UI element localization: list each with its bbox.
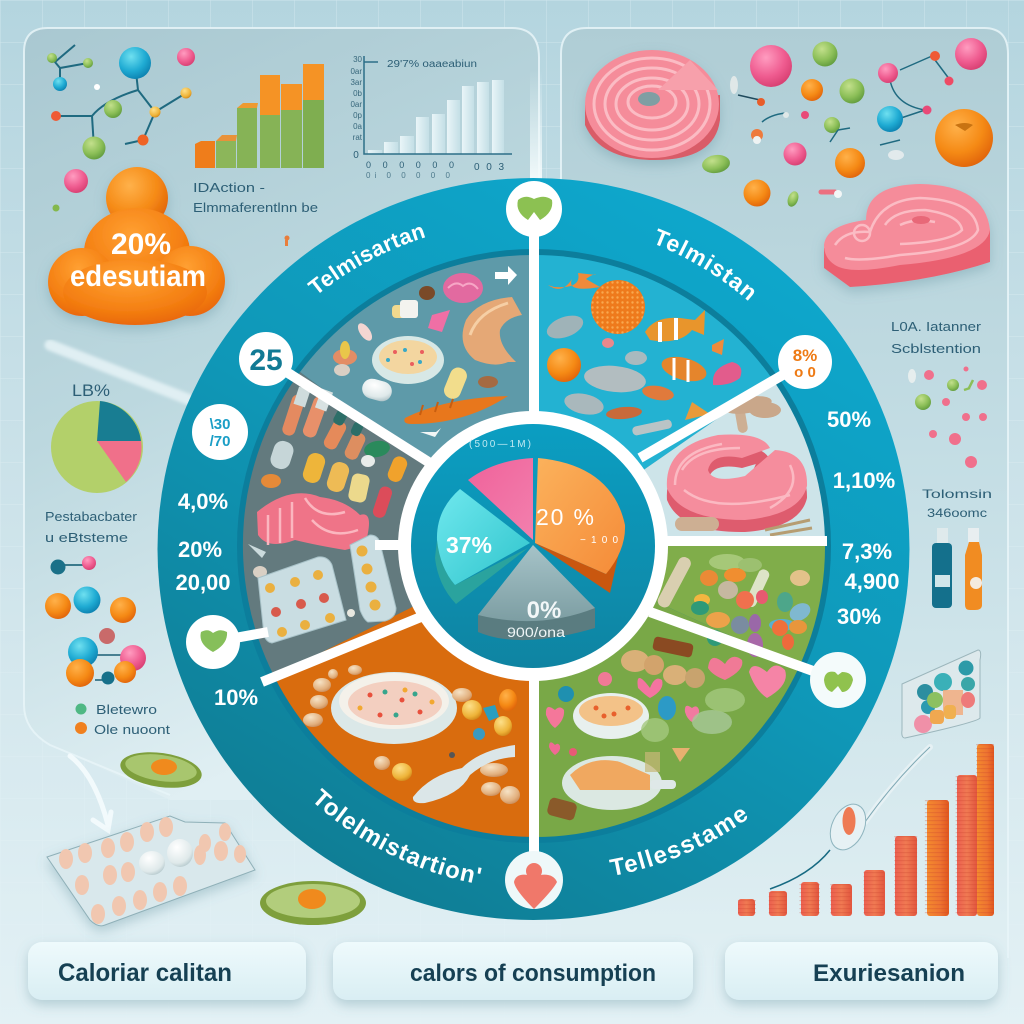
meat: right pale segment [667, 393, 812, 535]
bar chart: pale bars with axis: 0i 0 0 0 0 0 [366, 171, 451, 180]
center hub with pie chart [398, 411, 668, 681]
panel: top left [24, 28, 539, 800]
ring label: bottom right: Tellesstame [609, 810, 748, 875]
text: bottle note [922, 487, 992, 520]
chart caption: IDAction - [193, 180, 265, 195]
button: Caloriar calitan [28, 942, 306, 1000]
bar chart: pale bars with axis: 0 [353, 150, 359, 161]
pie slice: cyan: 37% [446, 532, 492, 558]
ring label: top right: Telmistan [657, 228, 754, 301]
pie caption: Pestabacbater [45, 509, 138, 524]
bar chart: pale bars with axis: 0ar [350, 100, 362, 109]
badge: green leaf right [810, 652, 866, 708]
bar chart: pale bars with axis: 0 0 0 0 0 0 [366, 160, 454, 170]
pie slice: orange: 20 % [536, 504, 594, 530]
pie caption: u eBtsteme [45, 530, 128, 545]
food items: top right fish segment [544, 273, 741, 436]
button: calors of consumption: calors of consumption [410, 960, 656, 987]
pills: left gray segment [248, 387, 409, 643]
segment: lower left orange [274, 546, 534, 837]
food items: lower left orange segment [303, 665, 520, 804]
chart caption [193, 180, 318, 215]
segment: lower right green [534, 546, 799, 837]
segment: left gray [243, 372, 534, 676]
ring label: bottom left: Tolelmistartion' [315, 788, 482, 883]
pie chart: left: LB% [72, 381, 110, 400]
small hearts [908, 366, 987, 468]
center hub with pie chart: (500—1M) [469, 439, 531, 450]
pills: right green segment [656, 554, 814, 657]
bar chart: pale bars with axis [350, 55, 512, 180]
ring percentages: 10% [214, 685, 258, 710]
button: calors of consumption [333, 942, 693, 1000]
legend [75, 702, 170, 737]
text: bottle note: Tolomsin [922, 487, 992, 501]
badge: 30/70: /70 [210, 433, 230, 450]
callout: orange blob 20%: edesutiam [70, 260, 206, 293]
molecule: left spheres [45, 556, 146, 687]
food items: lower right green segment [546, 636, 786, 821]
ring percentages: 4,0% [178, 489, 228, 514]
badge: 8% orange: o 0 [794, 364, 816, 381]
chart caption: Elmmaferentlnn be [193, 200, 318, 215]
ring percentages: 1,10% [833, 468, 895, 493]
bar chart: pale bars with axis: 0b [353, 89, 363, 98]
panel: top right [561, 28, 1008, 958]
segment: top right cyan [534, 255, 773, 546]
button: Caloriar calitan: Caloriar calitan [58, 959, 232, 987]
text: right upper note: L0A. Iatanner [891, 319, 982, 334]
spoon [770, 747, 930, 889]
bottles [932, 528, 982, 610]
ring percentages: 7,3% [842, 539, 892, 564]
badge: 30/70 [192, 404, 248, 460]
pie slice: gray: 900/ona [507, 624, 565, 640]
molecule: top left [47, 45, 195, 160]
legend: Ole nuoont [94, 722, 170, 737]
pie chart: left [51, 381, 143, 493]
text: right upper note [891, 319, 982, 356]
callout: orange blob 20%: 20% [111, 228, 171, 261]
pie caption [45, 509, 138, 545]
white spokes [213, 200, 838, 880]
pie slice: orange [535, 458, 625, 593]
meat: top right ring [585, 50, 720, 160]
bar chart: pale bars with axis: rat [353, 133, 363, 142]
arrow: white curved [70, 756, 111, 830]
badge: 25 [239, 332, 293, 386]
badge: pink person bottom [505, 851, 563, 909]
button: Exuriesanion: Exuriesanion [813, 960, 965, 987]
blister pack [47, 816, 255, 926]
badge: 8% orange: 8% [793, 346, 817, 365]
small blister card [902, 650, 981, 738]
text: bottle note: 346oomc [927, 506, 987, 520]
button: Exuriesanion [725, 942, 998, 1000]
bar chart: pale bars with axis: 3ar [350, 78, 362, 87]
ring percentages [175, 407, 900, 710]
segment: right green [534, 546, 825, 667]
bar chart: pale bars with axis: 0a [353, 122, 363, 131]
meat: right heart shaped [824, 184, 990, 287]
bar chart: orange and green [195, 64, 324, 168]
food items: top left segment [333, 266, 522, 437]
icon: green lens upper [118, 747, 204, 793]
legend: Bletewro [96, 702, 157, 717]
badge: green leaf top [506, 181, 562, 237]
pie slice: gray [478, 545, 595, 640]
badge: green heart left [186, 615, 240, 669]
badge: 25: 25 [249, 344, 283, 377]
ring percentages: 50% [827, 407, 871, 432]
ring percentages: 4,900 [844, 569, 900, 594]
bar chart: pale bars with axis: 0ar [350, 67, 362, 76]
outer ring [158, 178, 910, 920]
segment: right pale [534, 380, 825, 546]
pie slice: pink [468, 458, 533, 540]
pale connector above top badge [530, 70, 542, 185]
badge: 30/70: \30 [210, 416, 230, 433]
ring percentages: 20,00 [175, 570, 231, 595]
arrow: pale line to wheel [50, 345, 190, 400]
ring percentages: 20% [178, 537, 222, 562]
small dots near blob [52, 169, 290, 246]
bar chart: pale bars with axis: 0 0 3 [474, 162, 504, 173]
text: right upper note: Scblstention [891, 341, 981, 356]
badge: 8% orange [778, 335, 832, 389]
ring inner edge [237, 249, 831, 843]
spheres and molecule: top right [701, 38, 993, 208]
pie slice: gray: 0% [527, 597, 561, 624]
callout: orange blob 20% [48, 167, 225, 325]
wheel [158, 178, 910, 920]
segment: top left slate [300, 255, 534, 546]
bar chart: pale bars with axis: 29'7% oaaeabiun [387, 59, 477, 70]
icon: green lens lower [260, 881, 366, 925]
bar chart: red stacks [738, 744, 994, 916]
bar chart: pale bars with axis: 0p [353, 111, 363, 120]
pie slice: cyan [435, 489, 530, 604]
ring label: top left: Telmisartan [306, 227, 426, 293]
bar chart: pale bars with axis: 30 [353, 55, 363, 64]
pie slice: orange: −100 [580, 535, 618, 546]
ring percentages: 30% [837, 604, 881, 629]
